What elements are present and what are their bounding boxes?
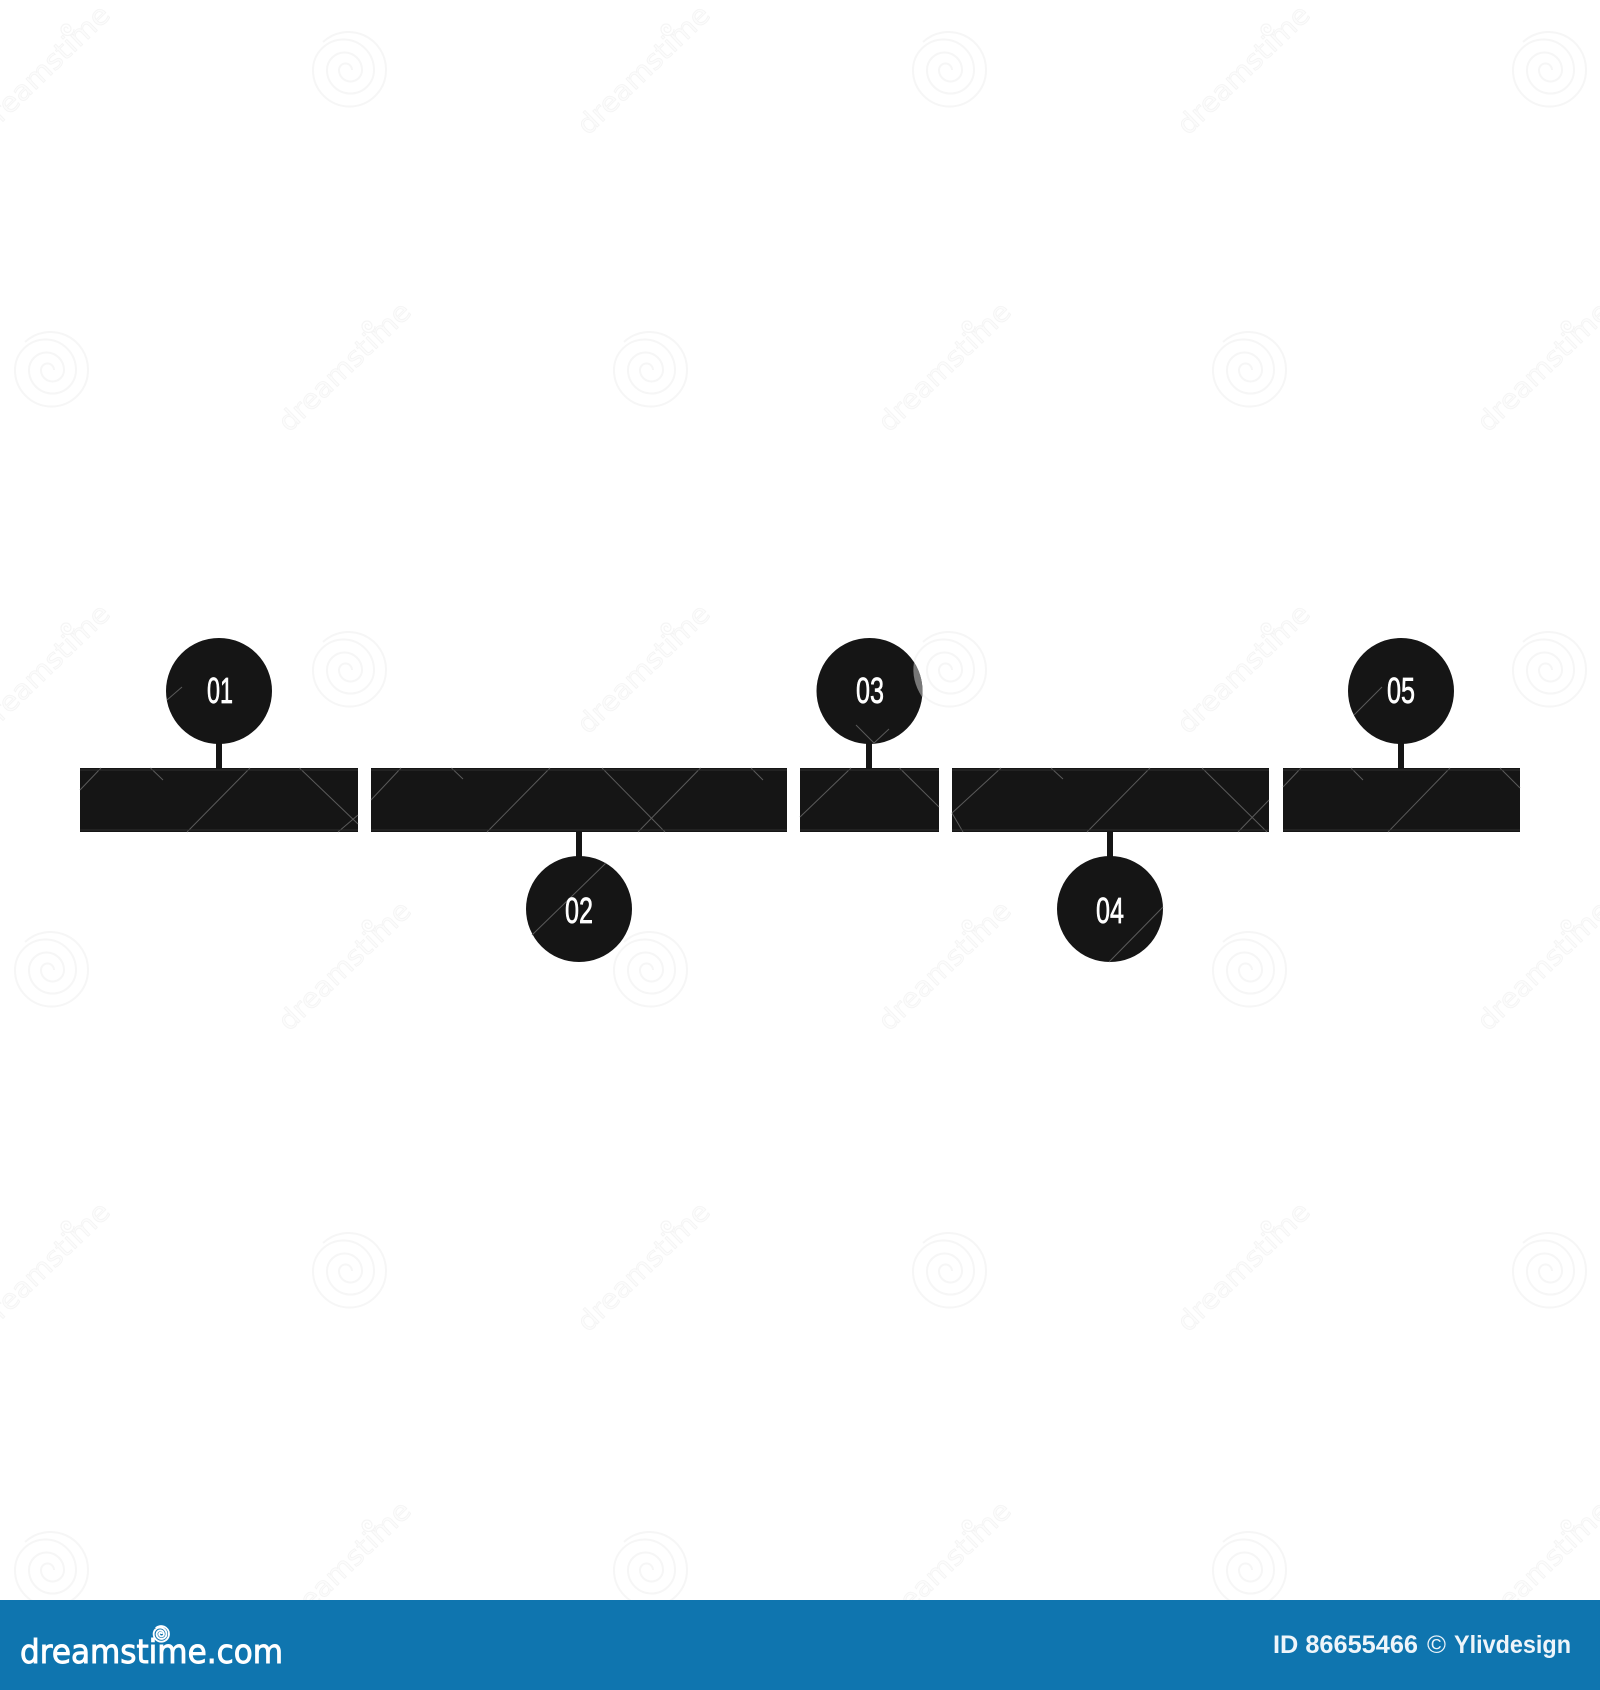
footer logo spiral icon: [154, 1626, 169, 1642]
watermark text: dreamstime: [1171, 598, 1317, 740]
image id and credit: ID 86655466: [1273, 1631, 1418, 1659]
watermark text: dreamstime: [272, 895, 418, 1037]
segment 4 with marker 04: [952, 768, 1269, 962]
watermark text: dreamstime: [1171, 1196, 1317, 1338]
watermark text: dreamstime: [272, 1495, 418, 1637]
segment 4 with marker 04: 04: [1096, 890, 1124, 931]
image id and credit: [1273, 1631, 1571, 1659]
watermark text: dreamstime: [272, 296, 418, 438]
footer logo text: dreamstime.com: [20, 1632, 283, 1671]
segment 1 with marker 01: 01: [207, 670, 233, 711]
segment 5 with marker 05: 05: [1387, 670, 1415, 711]
segment 5 with marker 05: [1283, 638, 1520, 832]
image id and credit: ©: [1427, 1631, 1447, 1659]
image id and credit: Ylivdesign: [1454, 1631, 1571, 1659]
watermark text: dreamstime: [571, 598, 717, 740]
watermark text: dreamstime: [872, 895, 1018, 1037]
watermark text: dreamstime: [872, 296, 1018, 438]
watermark text: dreamstime: [872, 1495, 1018, 1637]
segment 2 with marker 02: [371, 768, 787, 962]
segment 1 with marker 01: [80, 638, 358, 832]
timeline: [80, 638, 1520, 962]
watermark text: dreamstime: [1171, 0, 1317, 141]
watermark text: dreamstime: [571, 1196, 717, 1338]
segment 3 with marker 03: [800, 638, 939, 832]
watermark text: dreamstime: [571, 0, 717, 141]
segment 2 with marker 02: 02: [565, 890, 593, 931]
footer bar: [0, 1600, 1600, 1690]
segment 3 with marker 03: 03: [856, 670, 884, 711]
